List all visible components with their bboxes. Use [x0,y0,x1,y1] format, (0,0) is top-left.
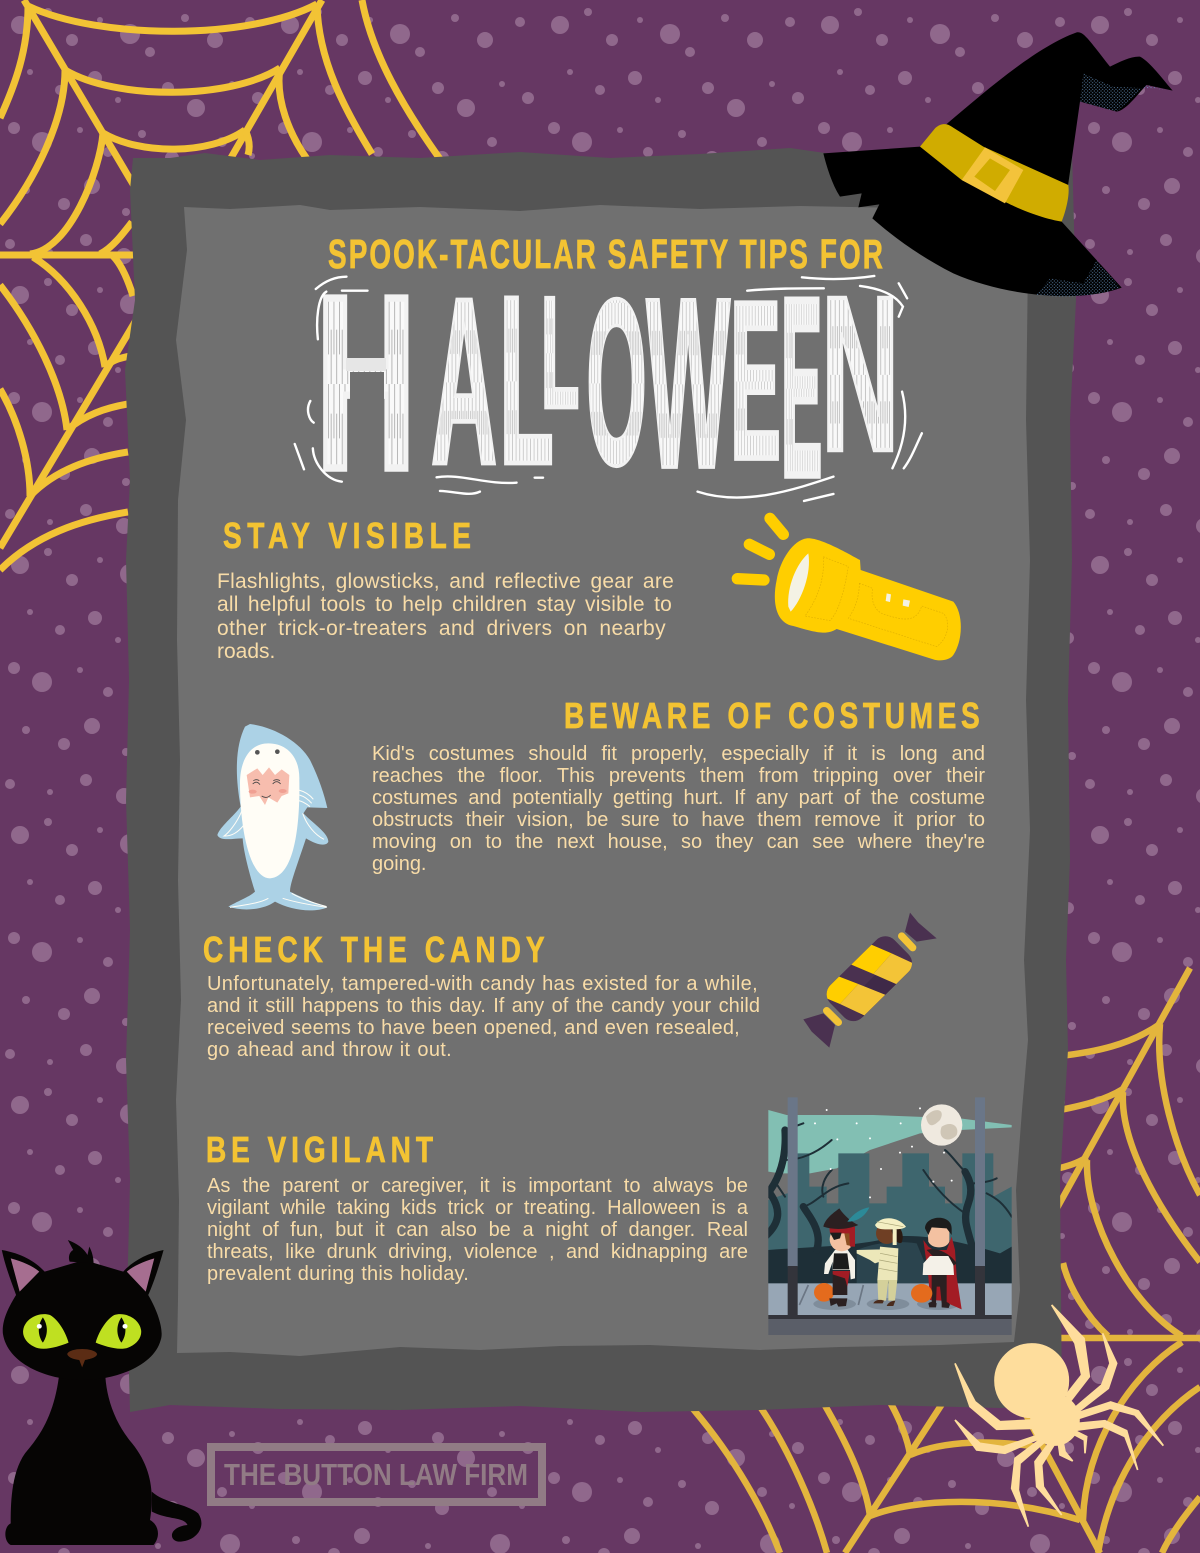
title: hand-lettered Halloween: N [821,249,899,497]
text block: be vigilant: prevalent during this holiday. [207,1263,469,1285]
vampire child [911,1218,962,1309]
logo: the button law firm: THE BUTTON LAW FIRM [224,1457,528,1492]
text block: check the candy: and it still happens to this day. If any of the candy your child [207,995,760,1017]
illustration: kids trick-or-treating at night [765,1097,1012,1335]
title: hand-lettered Halloween [316,246,899,530]
heading: check the candy: CHECK THE CANDY [203,930,545,970]
title: spook-tacular safety tips for: SPOOK-TACULAR SAFETY TIPS FOR [328,232,883,277]
text block: be vigilant: threats, like drunk driving, violence , and kidnapping are [207,1241,748,1263]
spider web: top left corner [0,0,440,570]
icon: spider [955,1305,1163,1527]
icon: flashlight [737,518,961,660]
text block: beware of costumes [372,743,985,875]
title swashes [295,276,922,501]
text block: beware of costumes: costumes and potentially getting hurt. If any part of the costume [372,787,985,809]
title: hand-lettered Halloween: L [541,265,579,441]
text block: beware of costumes: going. [372,853,426,875]
text block: beware of costumes: Kid's costumes should fit properly, especially if it is long and [372,743,985,765]
logo: the button law firm [211,1447,542,1502]
text block: be vigilant: As the parent or caregiver, it is important to always be [207,1175,748,1197]
heading: be vigilant: BE VIGILANT [206,1130,433,1170]
heading: beware of costumes: BEWARE OF COSTUMES [564,696,980,736]
text block: stay visible: other trick-or-treaters and drivers on nearby [217,617,666,640]
title: hand-lettered Halloween: W [646,247,730,519]
text block: be vigilant: vigilant while taking kids trick or treating. Halloween is a [207,1197,748,1219]
text block: beware of costumes: moving on to the next house, so they can see where they're [372,831,985,853]
text block: check the candy: received seems to have been opened, and even resealed, [207,1017,740,1039]
text block: stay visible [217,570,674,663]
title: hand-lettered Halloween: O [586,251,647,515]
text block: stay visible: Flashlights, glowsticks, and reflective gear are [217,570,674,593]
text block: stay visible: roads. [217,640,275,663]
icon: wrapped candy [803,913,937,1048]
text block: beware of costumes: reaches the floor. This prevents them from tripping over their [372,765,985,787]
text block: stay visible: all helpful tools to help children stay visible to [217,593,672,616]
spider web: bottom right corner [687,968,1200,1553]
text block: beware of costumes: obstructs their vision, be sure to have them remove it prior to [372,809,985,831]
panel: inner gray torn sheet [176,205,1030,1356]
icon: child in shark costume [217,724,328,910]
text block: check the candy [207,973,760,1061]
icon: witch hat [823,32,1173,297]
icon: black cat [2,1240,201,1545]
title: hand-lettered Halloween: E [781,247,822,530]
text block: check the candy: go ahead and throw it out. [207,1039,452,1061]
text block: check the candy: Unfortunately, tampered-with candy has existed for a while, [207,973,758,995]
mummy child [857,1218,906,1306]
title: hand-lettered Halloween: L [499,247,554,515]
title: hand-lettered Halloween: A [431,249,497,514]
H crossbar adjustment [346,358,386,402]
title: hand-lettered Halloween: E [730,254,781,506]
text block: be vigilant [207,1175,748,1285]
heading: stay visible: STAY VISIBLE [223,516,471,556]
pirate child [814,1207,869,1307]
panel: outer dark torn frame [125,148,1076,1412]
title: hand-lettered Halloween: H [316,246,416,521]
text block: be vigilant: night of fun, but it can also be a night of danger. Real [207,1219,748,1241]
